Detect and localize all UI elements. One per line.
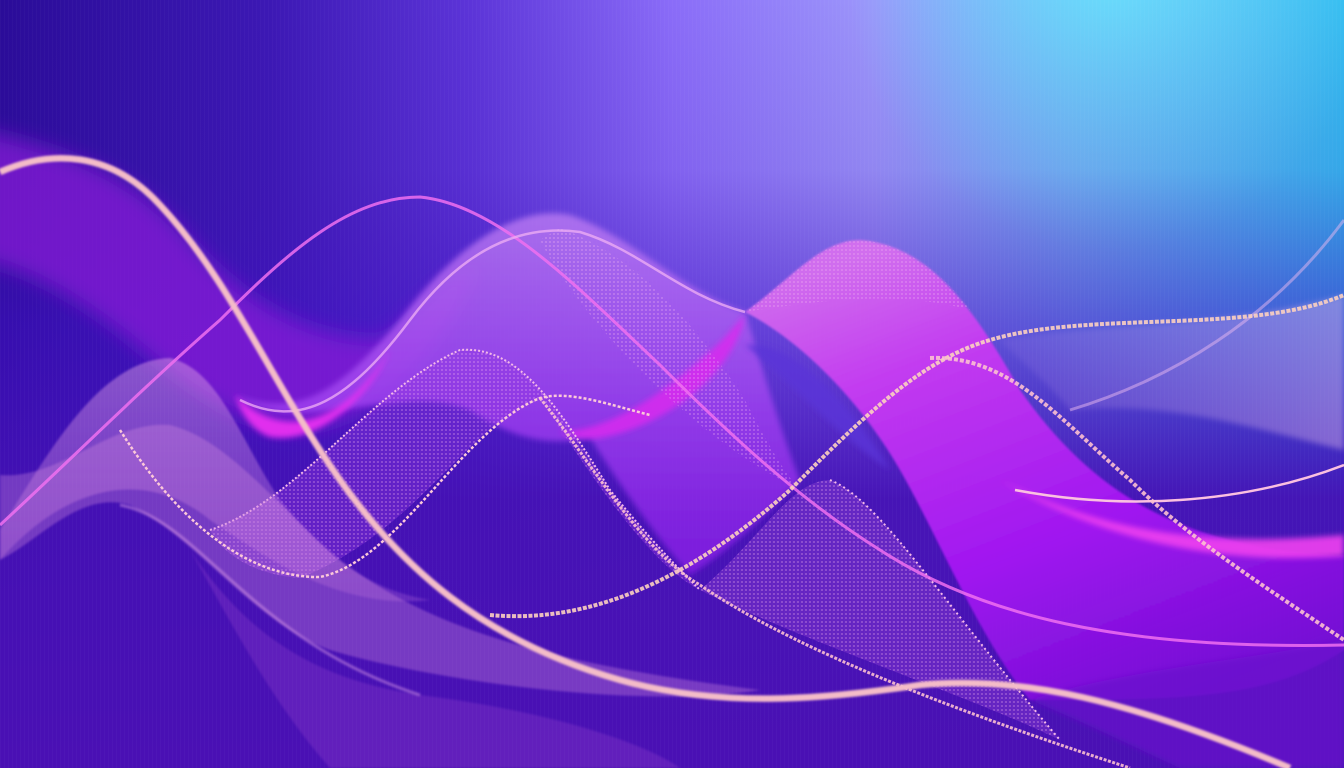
thick cream wave (0, 158, 1290, 768)
dotted line: left low wave (120, 396, 650, 577)
ribbon: blue-violet gap band (745, 345, 890, 470)
thin line: violet ribbon crest (240, 230, 1344, 501)
thin line: pink wave (0, 197, 1344, 645)
ribbon: mesh band centre left (210, 350, 700, 590)
dotted line: descending wave right (930, 358, 1344, 640)
ribbon: translucent band far right (1000, 220, 1344, 450)
dotted line: long rising wave (490, 295, 1344, 616)
ribbon: mesh band lower centre (700, 480, 1060, 740)
ribbon: large magenta band right (745, 240, 1344, 768)
ribbon: pale translucent lower left sheets (0, 358, 760, 768)
ribbon: central violet band with magenta lower edge (235, 213, 800, 575)
dotted line: lower diagonal wave (540, 398, 1130, 768)
ribbon: dark purple upper left sweep (0, 130, 480, 430)
